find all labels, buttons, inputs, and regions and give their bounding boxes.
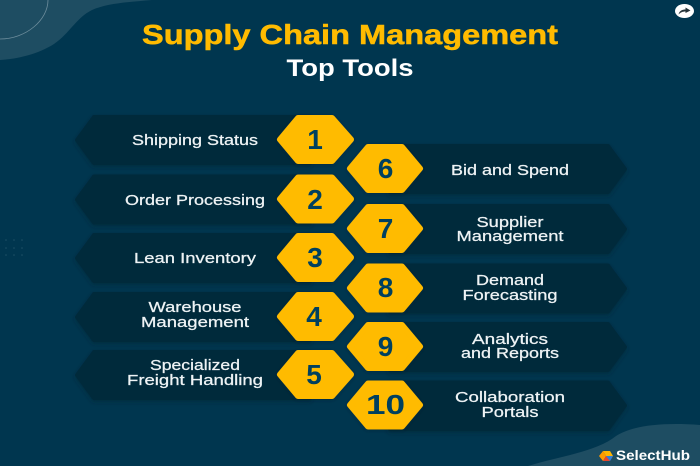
item 10: Collaboration Portals: Collaboration — [455, 390, 565, 406]
item 6: Bid and Spend: Bid and Spend — [451, 163, 569, 179]
item 9: Analytics and Reports: and Reports — [461, 346, 559, 362]
item 7: Supplier Management: Supplier — [476, 215, 544, 231]
item 6: Bid and Spend: 6 — [378, 153, 393, 184]
item 5: Specialized Freight Handling: Freight Handling — [127, 373, 263, 389]
item 8: Demand Forecasting: 8 — [378, 272, 393, 303]
item 3: Lean Inventory: 3 — [307, 242, 323, 273]
item 9: Analytics and Reports — [350, 324, 625, 370]
item 4: Warehouse Management: 4 — [306, 301, 322, 332]
item 5: Specialized Freight Handling: 5 — [306, 359, 322, 390]
icon: share button — [675, 4, 694, 18]
subtitle: Top Tools — [286, 55, 414, 82]
item 10: Collaboration Portals: 10 — [366, 389, 405, 420]
item 2: Order Processing: 2 — [307, 184, 323, 215]
item 5: Specialized Freight Handling — [77, 352, 351, 398]
item 1: Shipping Status: Shipping Status — [132, 133, 258, 149]
logo: SelectHub: SelectHub — [616, 447, 690, 463]
item 4: Warehouse Management: Warehouse — [148, 300, 242, 316]
item 3: Lean Inventory — [77, 235, 351, 281]
decorative dot grid — [5, 239, 23, 256]
item 2: Order Processing — [77, 176, 351, 222]
item 10: Collaboration Portals — [350, 382, 625, 429]
item 3: Lean Inventory: Lean Inventory — [134, 251, 257, 267]
item 8: Demand Forecasting — [350, 266, 625, 312]
item 9: Analytics and Reports: 9 — [378, 331, 393, 362]
decorative blob: top left — [0, 0, 152, 60]
item 4: Warehouse Management: Management — [141, 315, 249, 331]
item 1: Shipping Status: 1 — [307, 124, 323, 155]
item 5: Specialized Freight Handling: Specialized — [150, 358, 240, 374]
title: Supply Chain Management — [142, 19, 558, 50]
item 2: Order Processing: Order Processing — [125, 193, 265, 209]
item 10: Collaboration Portals: Portals — [482, 405, 538, 421]
item 4: Warehouse Management — [77, 294, 351, 340]
item 7: Supplier Management: 7 — [378, 213, 393, 244]
item 1: Shipping Status — [77, 117, 351, 163]
item 9: Analytics and Reports: Analytics — [472, 332, 548, 348]
item 7: Supplier Management: Management — [456, 229, 564, 245]
decorative blob: bottom right — [528, 424, 700, 466]
item 8: Demand Forecasting: Demand — [476, 273, 544, 289]
item 8: Demand Forecasting: Forecasting — [462, 288, 558, 304]
item 6: Bid and Spend — [350, 146, 625, 192]
item 7: Supplier Management — [350, 206, 625, 252]
